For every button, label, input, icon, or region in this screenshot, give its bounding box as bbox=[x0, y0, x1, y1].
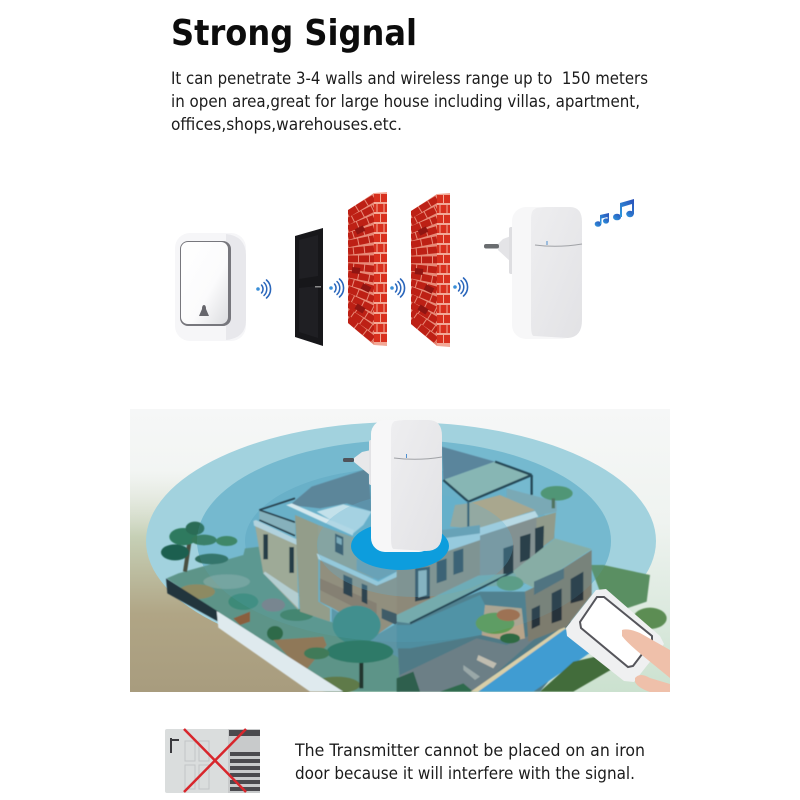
warning text: The Transmitter cannot be placed on an iron bbox=[294, 741, 645, 760]
loungers bbox=[463, 655, 497, 680]
scene background bbox=[130, 409, 670, 692]
icon: signal waves 3 bbox=[390, 279, 405, 297]
pergola glass bbox=[443, 462, 532, 502]
icon: iron door with red cross bbox=[165, 729, 260, 793]
garden wall and fence bbox=[166, 578, 343, 692]
tower bbox=[480, 511, 544, 582]
right block facade bbox=[525, 550, 592, 642]
icon: music notes bbox=[595, 199, 634, 227]
garden bbox=[167, 547, 400, 693]
blue base disc bbox=[351, 522, 449, 570]
icon: signal waves 2 bbox=[329, 279, 344, 297]
house and garden, right half bbox=[397, 447, 667, 692]
upper centre wall bbox=[318, 525, 373, 578]
pergola frame bbox=[443, 462, 532, 528]
glazed room bbox=[482, 605, 525, 642]
canopy bbox=[397, 572, 520, 623]
wood deck bbox=[450, 495, 535, 529]
left pine tree bbox=[161, 522, 237, 572]
under-canopy blue wall bbox=[332, 608, 400, 658]
pool bbox=[471, 627, 592, 692]
signal coverage rings bbox=[146, 422, 656, 634]
slate roof bbox=[442, 447, 495, 480]
hedge bbox=[540, 565, 667, 692]
ledge bbox=[317, 553, 400, 587]
tree behind tower bbox=[497, 576, 523, 591]
plant on terrace bbox=[541, 486, 573, 508]
icon: large receiver bbox=[343, 420, 442, 552]
front upper wall bbox=[397, 535, 480, 618]
icon: doorbell transmitter bbox=[175, 233, 246, 341]
balcony bbox=[357, 558, 400, 580]
icon: plug-in receiver bbox=[484, 207, 582, 339]
house and garden, left half bbox=[161, 468, 400, 693]
white roof and parapet bbox=[286, 503, 372, 536]
second wall section bbox=[295, 515, 330, 622]
illustration: house signal coverage bbox=[130, 409, 670, 693]
foreground tree bbox=[304, 606, 393, 688]
icon: signal waves 1 bbox=[256, 280, 271, 298]
title: Strong Signal bbox=[171, 13, 417, 54]
signal overlay bbox=[197, 440, 611, 642]
icon: signal waves 4 bbox=[453, 278, 468, 296]
signal diagram bbox=[175, 192, 634, 347]
warning text: door because it will interfere with the signal. bbox=[295, 764, 635, 783]
warning text bbox=[294, 741, 645, 783]
small tree bbox=[476, 609, 520, 643]
description text: offices,shops,warehouses.etc. bbox=[171, 115, 402, 134]
lower railing bbox=[442, 524, 480, 538]
icon: brick wall 1 bbox=[348, 192, 387, 346]
lower glass wall bbox=[397, 595, 485, 648]
ground and deck bbox=[397, 592, 587, 692]
lower centre wall bbox=[320, 560, 400, 635]
right block roof bbox=[508, 538, 592, 588]
left wing facade bbox=[253, 498, 298, 610]
ledge bbox=[446, 533, 481, 552]
inner signal overlay bbox=[317, 493, 513, 597]
icon: black door bbox=[295, 228, 323, 346]
description text bbox=[171, 69, 648, 134]
description text: It can penetrate 3-4 walls and wireless range up to 150 meters bbox=[171, 69, 648, 88]
description text: in open area,great for large house including villas, apartment, bbox=[171, 92, 640, 111]
icon: hand pressing doorbell bbox=[566, 589, 670, 692]
slate roof bbox=[290, 468, 372, 512]
icon: brick wall 2 bbox=[411, 193, 450, 347]
roof deck railing bbox=[507, 488, 557, 517]
tan upper wall right bbox=[536, 512, 556, 546]
